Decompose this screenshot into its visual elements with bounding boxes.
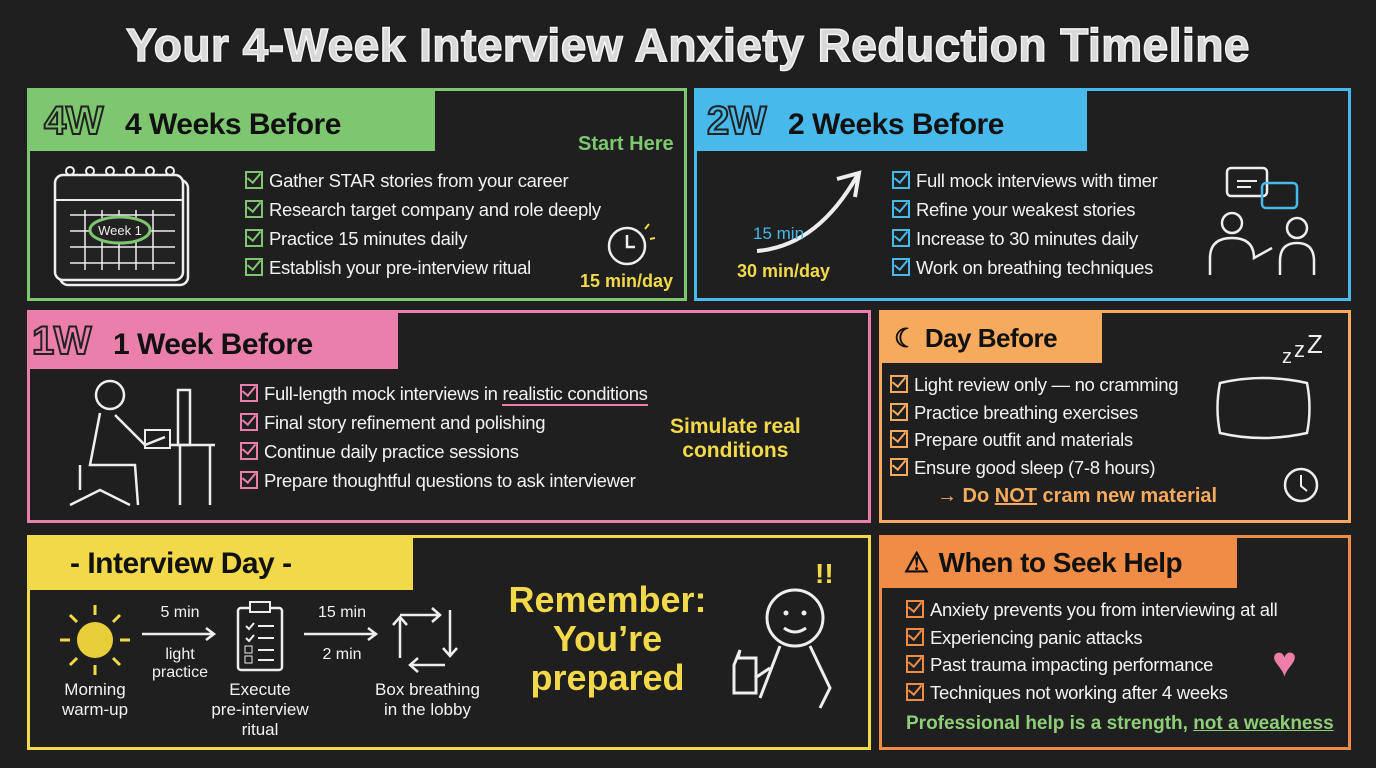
checklist <box>890 374 1178 478</box>
checklist: Research target company and role deeply <box>269 199 601 220</box>
icon: pillow: z <box>1282 346 1292 368</box>
checklist <box>892 170 1158 278</box>
header band <box>30 538 413 590</box>
panel: when to seek help <box>879 535 1351 750</box>
arrow: 15 min / 2 min: 2 min <box>322 646 362 663</box>
icon: pillow <box>1216 333 1322 440</box>
checklist: Final story refinement and polishing <box>264 412 545 433</box>
arrow: 5 min light practice: practice <box>152 664 208 681</box>
panel: 4 weeks before <box>27 88 687 301</box>
checklist: Practice breathing exercises <box>914 402 1138 422</box>
checklist: Experiencing panic attacks <box>930 626 1142 648</box>
checklist: Work on breathing techniques <box>916 257 1153 278</box>
header band <box>30 313 398 369</box>
text: execute ritual <box>211 680 309 739</box>
icon: clock <box>608 223 655 266</box>
icon: pillow: z <box>1294 337 1305 362</box>
callout: professional help: Professional help is a strength, not a weakness <box>906 713 1334 734</box>
icon: calendar <box>54 166 190 286</box>
header band: 2W 2 Weeks Before <box>707 99 1004 143</box>
checklist: Continue daily practice sessions <box>264 441 519 462</box>
checklist: Establish your pre-interview ritual <box>269 257 531 278</box>
checklist: Ensure good sleep (7-8 hours) <box>914 456 1155 478</box>
checklist <box>240 383 648 491</box>
checklist: Light review only — no cramming <box>914 374 1178 395</box>
callout: start here: Start Here <box>578 133 674 155</box>
header band <box>882 538 1237 588</box>
arrow: 5 min light practice: light <box>165 646 195 663</box>
checklist: Practice 15 minutes daily <box>269 228 467 249</box>
header band: ⚠ When to Seek Help <box>904 547 1182 578</box>
text: box breathing: Box breathing <box>375 680 480 699</box>
checklist: Increase to 30 minutes daily <box>916 228 1138 249</box>
callout: remember: prepared <box>530 657 685 698</box>
callout: remember: You’re <box>553 618 662 659</box>
callout: remember <box>508 579 707 698</box>
arrow: 15 min / 2 min <box>304 604 378 663</box>
panel: interview day <box>27 535 871 750</box>
icon: thumbs-up figure <box>732 558 834 709</box>
text: morning warm-up: Morning <box>64 680 126 699</box>
header band <box>882 313 1102 363</box>
text: box breathing: in the lobby <box>384 700 471 719</box>
header band: 4W 4 Weeks Before <box>44 99 341 143</box>
chart: rising arrow: 15 min <box>753 224 804 243</box>
icon: box breathing <box>392 607 458 673</box>
checklist: Prepare thoughtful questions to ask interviewer <box>264 470 636 491</box>
arrow: 5 min light practice: 5 min <box>160 604 200 621</box>
icon: calendar: Week 1 <box>98 223 142 238</box>
checklist: Anxiety prevents you from interviewing at all <box>930 599 1277 620</box>
checklist <box>245 170 602 278</box>
icon: heart: ♥ <box>1272 638 1297 685</box>
checklist: Prepare outfit and materials <box>914 429 1133 450</box>
header band <box>30 91 435 151</box>
text: execute ritual: ritual <box>242 720 278 739</box>
checklist: Past trauma impacting performance <box>930 654 1213 675</box>
header band: - Interview Day - <box>70 547 292 580</box>
callout: 15 min/day: 15 min/day <box>580 271 673 291</box>
header band: 1W 1 Week Before <box>32 319 313 363</box>
icon: alarm clock <box>1284 468 1318 502</box>
title: Your 4-Week Interview Anxiety Reduction Timeline <box>126 19 1250 71</box>
callout: remember: Remember: <box>508 579 707 620</box>
icon: clipboard <box>236 601 284 672</box>
callout: simulate real conditions <box>670 415 801 462</box>
icon: two people talking <box>1208 166 1316 275</box>
checklist: Gather STAR stories from your career <box>269 170 568 191</box>
arrow: 5 min light practice <box>142 604 216 681</box>
arrow: 15 min / 2 min: 15 min <box>318 604 366 621</box>
checklist: Refine your weakest stories <box>916 199 1135 220</box>
panel: 1 week before <box>27 310 871 523</box>
text: morning warm-up: warm-up <box>62 700 128 719</box>
callout: do not cram: → Do NOT cram new material <box>937 485 1217 507</box>
text: execute ritual: pre-interview <box>211 700 309 719</box>
checklist: Techniques not working after 4 weeks <box>930 682 1228 702</box>
text: execute ritual: Execute <box>229 680 291 699</box>
header band <box>697 91 1087 151</box>
text: box breathing <box>375 680 480 719</box>
callout: simulate real conditions: conditions <box>682 439 788 462</box>
panel: 2 weeks before <box>694 88 1351 301</box>
icon: thumbs-up figure: !! <box>815 558 834 589</box>
icon: person at desk <box>70 380 215 506</box>
chart: rising arrow: 30 min/day <box>737 261 830 281</box>
checklist <box>906 599 1277 703</box>
header band: ☾ Day Before <box>894 323 1057 353</box>
checklist: Full mock interviews with timer <box>916 170 1158 191</box>
chart: rising arrow <box>737 170 862 281</box>
checklist: Full-length mock interviews in realistic conditions <box>264 383 648 404</box>
icon: sun <box>60 605 130 675</box>
callout: simulate real conditions: Simulate real <box>670 415 801 438</box>
panel: day before <box>879 310 1351 523</box>
text: morning warm-up <box>62 680 128 719</box>
